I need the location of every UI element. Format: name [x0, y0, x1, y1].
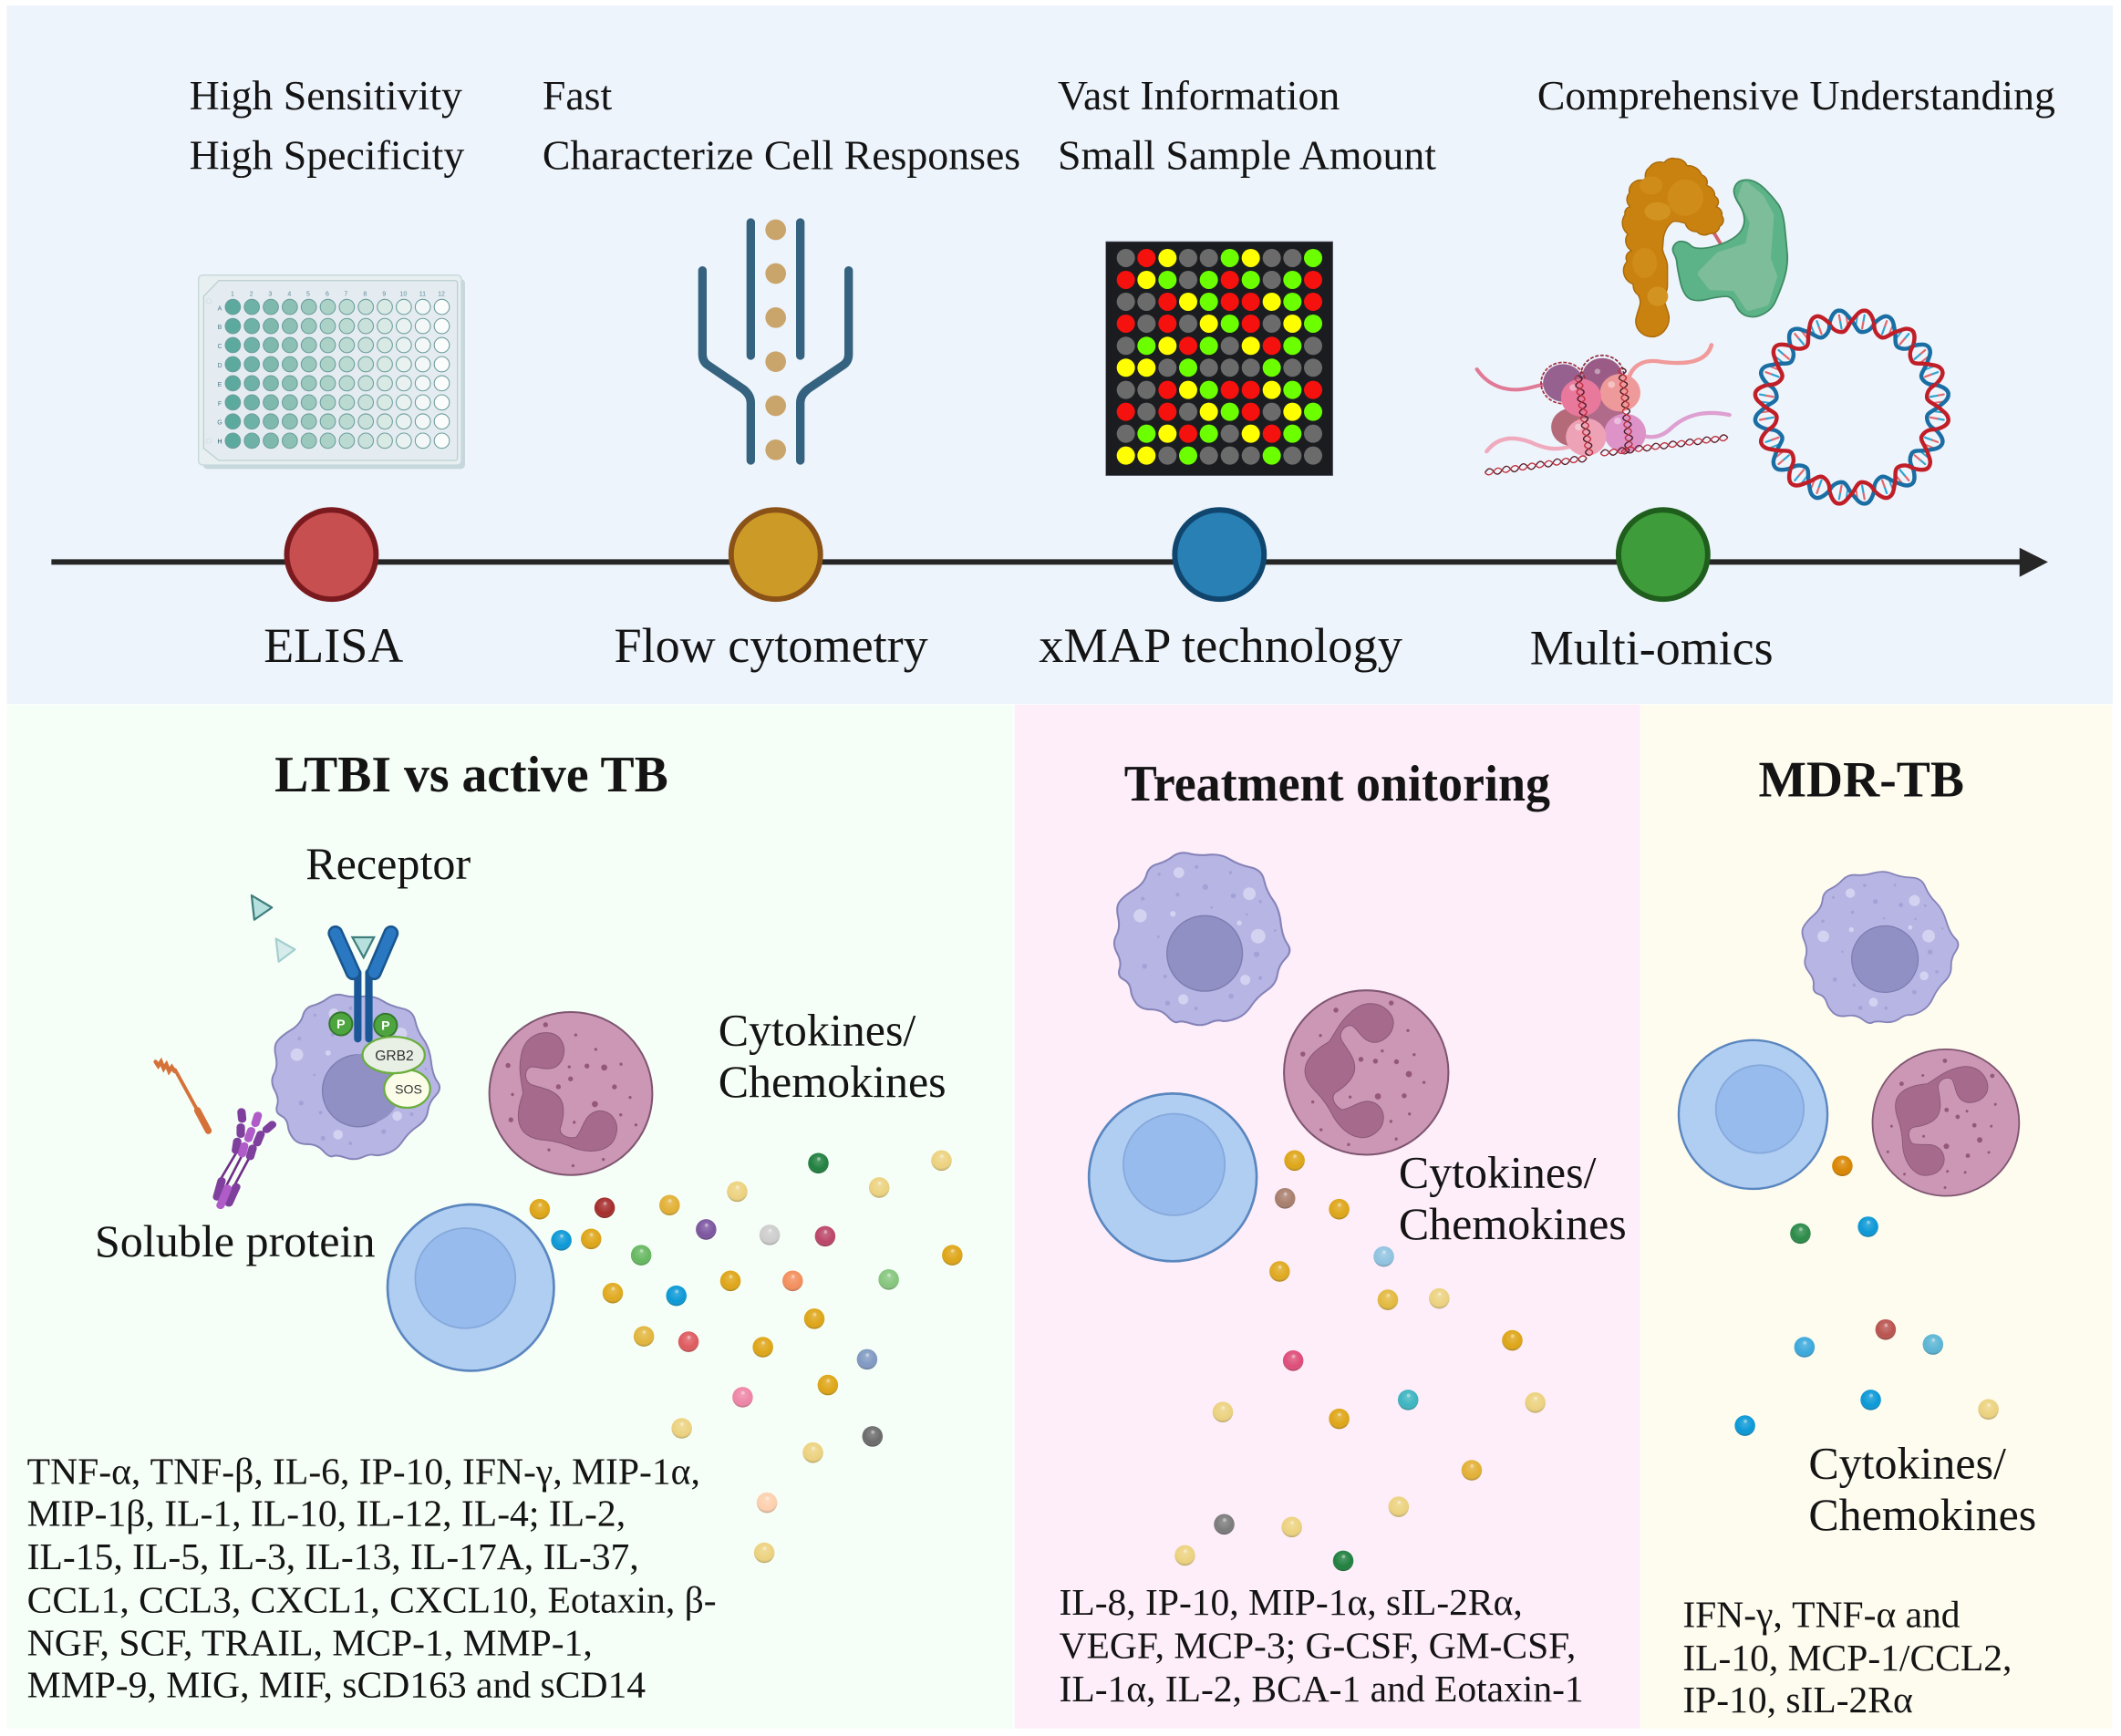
icon: macrophage (panel 2)	[1114, 852, 1289, 1025]
panel: Treatment monitoring	[1015, 705, 1640, 1729]
icon: nucleosome with histone tails	[1477, 345, 1729, 475]
text: xMAP advantages: Vast Information	[1058, 72, 1340, 119]
text: flow cytometry advantages	[543, 72, 1020, 178]
text: panel 1 cytokine list: MMP-9, MIG, MIF, sCD163 and sCD14	[27, 1664, 646, 1706]
cytokine dots: panel 2	[1174, 1151, 1546, 1571]
icon: purple soluble protein	[217, 1111, 272, 1205]
icon: macrophage with receptor signalling: P	[381, 1018, 389, 1033]
icon: 96-well ELISA plate: 1	[231, 291, 234, 297]
icon: flow cytometry nozzle	[702, 220, 849, 460]
heading: MDR-TB: MDR-TB	[1758, 752, 1964, 809]
label: Cytokines/Chemokines (panel 3)	[1808, 1437, 2036, 1540]
text: panel 3 cytokine list: IFN-γ, TNF-α and	[1682, 1594, 1961, 1636]
icon: 96-well ELISA plate: 10	[399, 291, 407, 297]
icon: macrophage with receptor signalling	[272, 934, 440, 1159]
icon: 96-well ELISA plate: 2	[250, 291, 253, 297]
text: panel 2 cytokine list: VEGF, MCP-3; G-CSF, GM-CSF,	[1060, 1625, 1576, 1667]
icon: 96-well ELISA plate: E	[218, 382, 222, 388]
label: ELISA: ELISA	[264, 618, 403, 673]
icon: 96-well ELISA plate: 5	[306, 291, 310, 297]
timeline node: ELISA	[286, 510, 376, 599]
icon: free ligands	[252, 895, 295, 962]
label: Soluble protein: Soluble protein	[95, 1215, 376, 1266]
icon: 96-well ELISA plate: C	[217, 344, 222, 350]
icon: 96-well ELISA plate: 12	[438, 291, 445, 297]
label: Cytokines/Chemokines (panel 1)	[719, 1005, 947, 1107]
text: xMAP advantages: Small Sample Amount	[1058, 131, 1436, 178]
text: panel 1 cytokine list: NGF, SCF, TRAIL, MCP-1, MMP-1,	[27, 1622, 593, 1664]
icon: macrophage with receptor signalling: GRB2	[375, 1049, 414, 1064]
label: Cytokines/Chemokines (panel 3): Cytokines/	[1808, 1437, 2006, 1488]
heading: LTBI vs active TB: LTBI vs active TB	[274, 747, 668, 803]
text: panel 3 cytokine list: IL-10, MCP-1/CCL2,	[1682, 1637, 2012, 1679]
text: ELISA advantages: High Specificity	[190, 131, 464, 178]
icon: 96-well ELISA plate: 3	[268, 291, 272, 297]
text: flow cytometry advantages: Characterize Cell Responses	[543, 131, 1020, 178]
text: panel 2 cytokine list	[1060, 1581, 1584, 1710]
label: Cytokines/Chemokines (panel 2): Chemokines	[1399, 1198, 1627, 1249]
icon: lymphocyte	[388, 1204, 554, 1370]
label: Cytokines/Chemokines (panel 2): Cytokines/	[1399, 1146, 1597, 1197]
icon: macrophage with receptor signalling: P	[336, 1017, 346, 1031]
icon: orange soluble protein	[156, 1061, 208, 1131]
icon: macrophage (panel 3)	[1791, 859, 1970, 1035]
text: panel 2 cytokine list: IL-8, IP-10, MIP-1α, sIL-2Rα,	[1060, 1581, 1523, 1623]
panel: detection technology timeline	[6, 5, 2113, 704]
icon: 96-well ELISA plate: 8	[363, 291, 367, 297]
icon: 96-well ELISA plate: B	[218, 325, 222, 331]
text: panel 3 cytokine list	[1682, 1594, 2012, 1720]
panel: LTBI vs active TB	[6, 705, 1013, 1729]
icon: 96-well ELISA plate	[199, 275, 465, 469]
text: panel 1 cytokine list: IL-15, IL-5, IL-3, IL-13, IL-17A, IL-37,	[27, 1535, 639, 1577]
label: Cytokines/Chemokines (panel 1): Cytokines/	[719, 1005, 916, 1056]
icon: neutrophil	[456, 978, 686, 1208]
timeline arrow	[51, 548, 2048, 577]
icon: 96-well ELISA plate: 4	[287, 291, 291, 297]
icon: neutrophil (panel 3)	[1848, 1025, 2043, 1220]
text: panel 1 cytokine list: MIP-1β, IL-1, IL-10, IL-12, IL-4; IL-2,	[27, 1492, 626, 1534]
heading: Treatment onitoring: Treatment onitoring	[1124, 756, 1550, 812]
icon: 96-well ELISA plate: H	[217, 439, 222, 446]
icon: 96-well ELISA plate: 6	[326, 291, 329, 297]
label: xMAP technology: xMAP technology	[1039, 617, 1402, 673]
timeline node: xMAP	[1174, 510, 1264, 599]
label: Multi-omics: Multi-omics	[1530, 620, 1774, 675]
text: panel 1 cytokine list: CCL1, CCL3, CXCL1, CXCL10, Eotaxin, β-	[27, 1578, 717, 1620]
timeline node: multi-omics	[1619, 510, 1708, 599]
text: panel 2 cytokine list: IL-1α, IL-2, BCA-1 and Eotaxin-1	[1060, 1668, 1584, 1710]
label: Cytokines/Chemokines (panel 2)	[1399, 1146, 1627, 1249]
cytokine dots: panel 3	[1734, 1155, 1999, 1436]
icon: neutrophil (panel 2)	[1284, 990, 1448, 1155]
cytokine dots: panel 1	[530, 1151, 963, 1563]
label: Receptor: Receptor	[305, 838, 471, 889]
text: panel 3 cytokine list: IP-10, sIL-2Rα	[1682, 1679, 1913, 1720]
icon: multi-omics proteins	[1622, 159, 1787, 336]
icon: 96-well ELISA plate: 11	[419, 291, 426, 297]
icon: lymphocyte (panel 3)	[1679, 1040, 1827, 1189]
icon: 96-well ELISA plate: 9	[382, 291, 386, 297]
text: ELISA advantages: High Sensitivity	[190, 72, 462, 119]
icon: lymphocyte (panel 2)	[1089, 1093, 1257, 1261]
icon: 96-well ELISA plate: A	[218, 305, 222, 312]
label: Cytokines/Chemokines (panel 1): Chemokines	[719, 1056, 947, 1107]
text: flow cytometry advantages: Fast	[543, 72, 613, 119]
icon: xMAP bead array	[1106, 242, 1333, 476]
text: ELISA advantages	[190, 72, 464, 178]
label: Flow cytometry: Flow cytometry	[614, 618, 928, 673]
panel: MDR-TB	[1640, 705, 2112, 1729]
icon: 96-well ELISA plate: 7	[344, 291, 347, 297]
icon: 96-well ELISA plate: F	[218, 401, 222, 408]
icon: circular DNA	[1755, 311, 1949, 503]
icon: 96-well ELISA plate: G	[217, 420, 222, 427]
text: multi-omics advantage: Comprehensive Understanding	[1537, 72, 2055, 119]
timeline node: flow cytometry	[731, 510, 821, 599]
text: xMAP advantages	[1058, 72, 1436, 178]
label: Cytokines/Chemokines (panel 3): Chemokines	[1808, 1489, 2036, 1540]
text: panel 1 cytokine list	[27, 1450, 717, 1706]
icon: macrophage with receptor signalling: SOS	[395, 1081, 422, 1096]
icon: 96-well ELISA plate: D	[217, 363, 222, 369]
text: panel 1 cytokine list: TNF-α, TNF-β, IL-6, IP-10, IFN-γ, MIP-1α,	[27, 1450, 700, 1492]
